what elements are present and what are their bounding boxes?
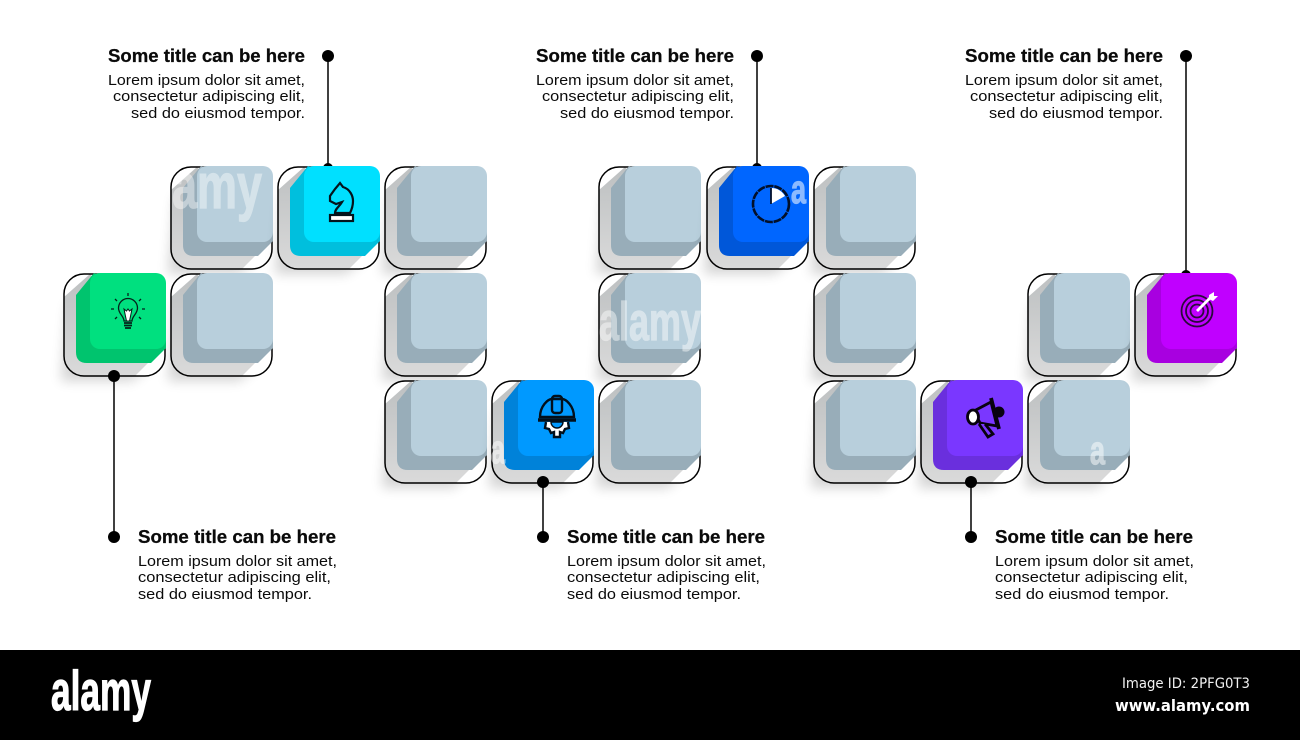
watermark fragments (172, 150, 1106, 473)
text block: bottom left: sed do eiusmod tempor. (138, 587, 312, 603)
website: www.alamy.com (1115, 696, 1250, 715)
text block: bottom left: consectetur adipiscing elit, (138, 570, 331, 586)
icon: light bulb (111, 293, 145, 328)
text block: top middle: consectetur adipiscing elit, (542, 89, 734, 105)
icon: target with dart (1182, 292, 1218, 326)
watermark fragments: a (1090, 429, 1106, 473)
text block: bottom right: Some title can be here (995, 527, 1193, 547)
icon: clock pie (753, 186, 789, 222)
text block: top right: Lorem ipsum dolor sit amet, (965, 73, 1163, 89)
tile: cyan step (275, 166, 380, 274)
text block: bottom middle: Lorem ipsum dolor sit amet, (567, 554, 766, 570)
text block: bottom right: consectetur adipiscing elit, (995, 570, 1188, 586)
text block: top right (965, 46, 1163, 122)
tile row 2 grey (168, 273, 1130, 381)
connector: step 5 violet (965, 476, 977, 543)
text block: bottom right (995, 527, 1194, 603)
connector: step 2 cyan (322, 50, 334, 173)
tile: violet step (918, 380, 1023, 488)
text block: bottom middle (567, 527, 766, 603)
connector: step 4 blue (751, 50, 763, 173)
watermark fragments: amy (172, 150, 262, 222)
text block: bottom left (138, 527, 337, 603)
connector: step 3 azure (537, 476, 549, 543)
text block: top left: sed do eiusmod tempor. (131, 106, 305, 122)
text block: top left: consectetur adipiscing elit, (113, 89, 305, 105)
text block: bottom middle: sed do eiusmod tempor. (567, 587, 741, 603)
watermark fragments: a (791, 168, 807, 212)
image id: Image ID: 2PFG0T3 (1122, 676, 1250, 692)
watermark fragments: a (491, 428, 505, 472)
text block: top left: Lorem ipsum dolor sit amet, (108, 73, 305, 89)
connector: step 6 magenta (1180, 50, 1192, 280)
text block: top middle: Lorem ipsum dolor sit amet, (536, 73, 734, 89)
watermark fragments: alamy (599, 292, 701, 352)
icon: chess knight (330, 183, 353, 221)
tile: azure step (489, 380, 594, 488)
icon: megaphone (968, 398, 1004, 437)
tile row 1 grey (168, 166, 916, 274)
text block: top right: consectetur adipiscing elit, (970, 89, 1163, 105)
text block: top right: sed do eiusmod tempor. (989, 106, 1163, 122)
text block: top right: Some title can be here (965, 46, 1163, 66)
text block: top middle: Some title can be here (536, 46, 734, 66)
text block: bottom left: Lorem ipsum dolor sit amet, (138, 554, 337, 570)
footer logo: alamy (51, 659, 151, 722)
tile: blue step (704, 166, 809, 274)
text block: top left: Some title can be here (108, 46, 305, 66)
connector: step 1 green (108, 370, 120, 543)
footer bar (0, 650, 1300, 740)
text block: top middle (536, 46, 734, 122)
text block: bottom left: Some title can be here (138, 527, 336, 547)
text block: top left (108, 46, 305, 122)
tile: green step (61, 273, 166, 381)
text block: top middle: sed do eiusmod tempor. (560, 106, 734, 122)
text block: bottom right: sed do eiusmod tempor. (995, 587, 1169, 603)
text block: bottom middle: Some title can be here (567, 527, 765, 547)
tile: magenta step (1132, 273, 1237, 381)
text block: bottom right: Lorem ipsum dolor sit amet, (995, 554, 1194, 570)
icon: helmet with gear (538, 396, 576, 437)
tile row 3 grey (382, 380, 1130, 488)
text block: bottom middle: consectetur adipiscing elit, (567, 570, 760, 586)
